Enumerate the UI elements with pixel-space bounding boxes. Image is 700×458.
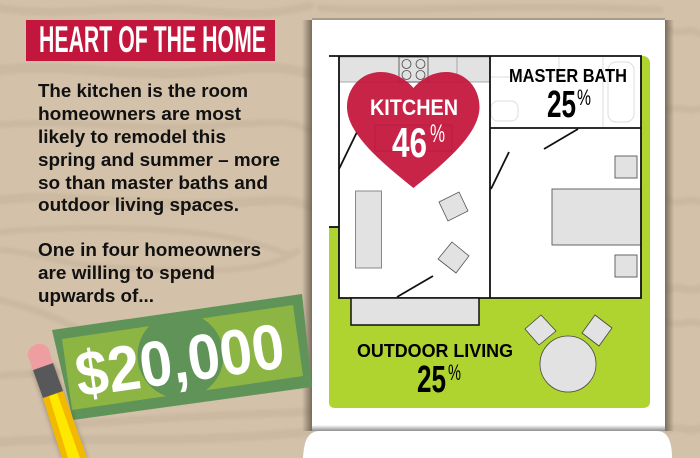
kitchen heart: 46: [392, 119, 427, 166]
outdoor living label: %: [448, 360, 461, 385]
dollar bill: $20,000: [71, 310, 289, 411]
floor plan: [329, 56, 641, 298]
walls and doors: [329, 56, 641, 298]
intro text block: [38, 81, 280, 215]
master bath label: %: [577, 85, 591, 110]
intro text block: likely to remodel this: [38, 127, 226, 147]
spending text block: One in four homeowners: [38, 240, 261, 260]
intro text block: The kitchen is the room: [38, 81, 248, 101]
kitchen counter: [339, 57, 490, 82]
kitchen island: [356, 191, 382, 268]
kitchen heart: [347, 72, 480, 188]
bathroom fixtures: [491, 57, 634, 128]
bedroom furniture: [552, 156, 641, 277]
spending text block: [38, 240, 261, 306]
heading banner: [26, 19, 275, 61]
intro text block: spring and summer – more: [38, 150, 280, 170]
kitchen table: [375, 125, 452, 151]
icon: stove: [399, 57, 428, 82]
master bath label: MASTER BATH: [509, 66, 627, 86]
outdoor living label: [357, 341, 513, 401]
intro text block: outdoor living spaces.: [38, 195, 239, 215]
icon: pencil: [28, 344, 87, 458]
patio step: [351, 298, 479, 325]
spending text block: upwards of...: [38, 286, 154, 306]
green yard: [329, 56, 650, 408]
master bath label: 25: [547, 84, 576, 126]
outdoor living label: 25: [417, 359, 446, 401]
kitchen heart: %: [430, 120, 445, 148]
intro text block: homeowners are most: [38, 104, 241, 124]
heading banner: HEART OF THE HOME: [39, 19, 266, 60]
lower page: [303, 431, 672, 458]
paper page: [302, 18, 674, 431]
spending text block: are willing to spend: [38, 263, 215, 283]
kitchen heart: KITCHEN: [370, 95, 458, 120]
patio table and chairs: [525, 315, 612, 392]
outdoor living label: OUTDOOR LIVING: [357, 341, 513, 361]
master bath label: [509, 66, 627, 126]
kitchen chairs: [438, 192, 469, 273]
intro text block: so than master baths and: [38, 173, 268, 193]
